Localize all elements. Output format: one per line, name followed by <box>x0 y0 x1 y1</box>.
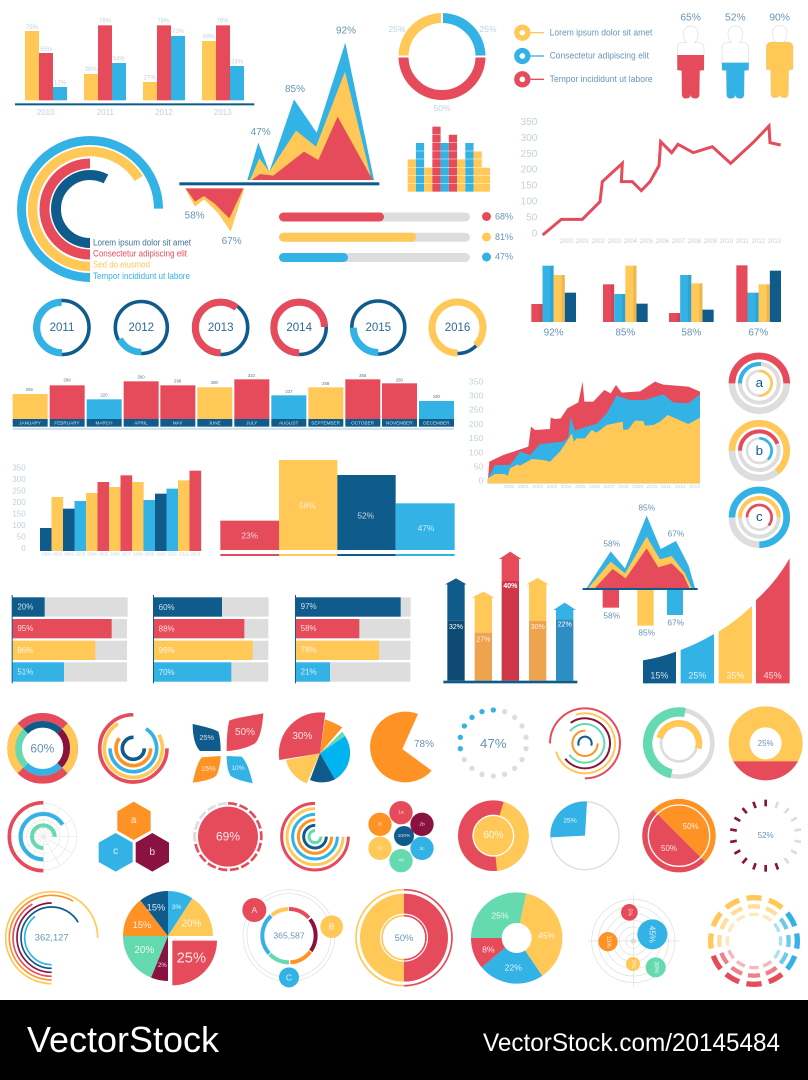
bubble flower: 4d <box>398 858 404 864</box>
small mountain with bars: 58% <box>603 611 621 621</box>
radial bar chart with legend: Sed do eiusmod <box>93 260 150 270</box>
monthly bar chart: 258 <box>322 381 330 386</box>
horizontal bars group 2 <box>153 595 269 683</box>
exploded pie 30% <box>279 712 350 783</box>
yearly vertical bar chart: 100 <box>12 521 26 530</box>
line chart: 2011 <box>736 239 749 245</box>
monthly bar chart: 310 <box>248 373 256 378</box>
stacked area chart: 250 <box>469 405 484 415</box>
stacked area chart: 150 <box>469 433 484 443</box>
thin concentric arcs <box>547 706 623 781</box>
monthly bar chart: JUNE <box>209 420 221 425</box>
yearly vertical bar chart: 300 <box>12 475 26 484</box>
yearly vertical bar chart: 2006 <box>110 551 120 556</box>
exploded pie with 25% slice: 20% <box>181 918 201 929</box>
horizontal bars group 2: 96% <box>159 646 175 655</box>
yearly vertical bar chart: 2004 <box>87 551 97 556</box>
disc with dashed ring 69% <box>190 799 266 874</box>
curved rising bars: 25% <box>688 671 706 681</box>
ring 2014 <box>272 300 326 354</box>
line chart: 2004 <box>624 239 638 245</box>
curved rising bars: 45% <box>764 671 782 681</box>
bar chart: yearly 2010-2013: 78% <box>157 19 170 25</box>
line chart: 150 <box>521 180 538 191</box>
stacked area chart: 300 <box>469 391 484 401</box>
stacked area chart: 2008 <box>618 484 629 490</box>
icon legend: Lorem ipsum dolor sit amet <box>550 27 653 37</box>
polar bubble chart: 5% <box>626 908 632 916</box>
ring 2012 <box>115 302 167 354</box>
half and half disc 50% <box>642 799 716 872</box>
exploded pie with 25% slice: 15% <box>147 902 165 912</box>
line chart: 2013 <box>768 239 782 245</box>
ring with satellites 365,587: A <box>251 905 257 915</box>
small mountain with bars <box>583 502 698 637</box>
bar chart: yearly 2010-2013: 30% <box>85 67 97 73</box>
green and yellow gauge rings <box>641 705 717 781</box>
exploded pie with 25% slice <box>123 891 217 985</box>
yearly vertical bar chart: 2011 <box>168 551 178 556</box>
stacked area chart: 2003 <box>547 484 558 490</box>
segmented ring <box>693 880 808 1002</box>
line chart: 2010 <box>720 239 734 245</box>
polar bubble chart: 5% <box>630 960 636 968</box>
bubble flower <box>368 801 434 872</box>
polar bubble chart: 15% <box>605 936 611 948</box>
bar chart: yearly 2010-2013: 2011 <box>97 108 114 117</box>
yellow disc 25% <box>729 706 803 780</box>
horizontal bars group 1: 20% <box>17 602 33 611</box>
yearly vertical bar chart: 150 <box>12 509 26 518</box>
two-tone donut 60%: 60% <box>483 830 503 841</box>
monthly bar chart: 289 <box>63 377 71 382</box>
monthly bar chart <box>13 373 454 430</box>
bar chart: yearly 2010-2013: 55% <box>40 47 53 53</box>
ring with satellites 365,587: B <box>329 922 335 932</box>
exploded pie with 25% slice: 15% <box>133 920 151 930</box>
mountain chart with baseline: 92% <box>336 25 356 36</box>
line chart: 2001 <box>576 239 590 245</box>
monthly bar chart: JANUARY <box>19 420 41 425</box>
four grouped bar charts: 58% <box>681 327 701 338</box>
four wide bars: 58% <box>299 500 316 510</box>
stacked area chart: 2002 <box>532 484 543 490</box>
radial bar chart with legend: Consectetur adipiscing elit <box>93 248 187 260</box>
ring 2016: 2016 <box>445 322 470 334</box>
line chart: 2000 <box>560 239 574 245</box>
bubble flower: 1a <box>398 810 404 816</box>
double ring 50% <box>356 890 452 986</box>
mountain chart with baseline: 85% <box>285 84 305 95</box>
mountain chart with baseline: 67% <box>222 236 242 247</box>
line chart: 2008 <box>688 239 702 245</box>
bar chart: yearly 2010-2013: 27% <box>144 75 156 81</box>
bubble flower: 6f <box>378 821 383 827</box>
donut chart top: 25% <box>388 24 406 34</box>
donut 60% <box>0 704 87 793</box>
tick gauge 52%: 52% <box>758 831 774 840</box>
yearly vertical bar chart: 2001 <box>53 551 63 556</box>
line chart: 100 <box>521 196 538 207</box>
bar chart: yearly 2010-2013: 75% <box>26 25 39 31</box>
small mountain with bars: 85% <box>638 502 656 512</box>
people icons: 52% <box>725 12 746 23</box>
ring 2011: 2011 <box>50 322 74 334</box>
arrow bars: 27% <box>476 636 490 643</box>
rainbow arcs <box>282 803 348 870</box>
yearly vertical bar chart: 2007 <box>122 551 132 556</box>
ring 2012: 2012 <box>129 322 154 334</box>
bar chart: yearly 2010-2013: 78% <box>217 19 229 25</box>
horizontal bars group 3: 58% <box>301 624 317 633</box>
four grouped bar charts <box>531 265 781 338</box>
bar chart: yearly 2010-2013: 12% <box>54 80 67 86</box>
polar grid rings <box>9 803 77 871</box>
multi arc counter 362,127: 362,127 <box>35 933 69 943</box>
small mountain with bars: 67% <box>668 528 685 538</box>
quarter pie outline 25% <box>550 802 619 870</box>
monthly bar chart: MARCH <box>95 420 113 425</box>
yearly vertical bar chart: 2008 <box>133 551 143 556</box>
ring 2016 <box>432 302 484 354</box>
line chart: 2006 <box>656 239 670 245</box>
line chart: 2007 <box>672 239 686 245</box>
horizontal bars group 3: 21% <box>301 667 317 676</box>
line chart: 350 <box>521 117 538 128</box>
year rings row <box>35 300 484 354</box>
yearly vertical bar chart <box>12 463 201 556</box>
watermark footer <box>0 1000 808 1080</box>
line chart: 2009 <box>704 239 718 245</box>
stacked area chart <box>469 376 700 490</box>
monthly bar chart: 300 <box>137 374 145 379</box>
disc with dashed ring 69%: 69% <box>216 830 240 844</box>
curved rising bars: 15% <box>650 671 668 681</box>
ring 2014: 2014 <box>286 322 313 334</box>
four grouped bar charts: 85% <box>615 327 635 338</box>
four wide bars: 23% <box>241 531 259 541</box>
yearly vertical bar chart: 2010 <box>156 551 166 556</box>
four grouped bar charts: 92% <box>544 327 564 338</box>
bar chart: yearly 2010-2013: 69% <box>203 35 216 41</box>
arrow bars: 40% <box>503 583 518 590</box>
monthly bar chart: DECEMBER <box>423 420 450 425</box>
monthly bar chart: OCTOBER <box>351 420 375 425</box>
yearly vertical bar chart: 50 <box>17 532 26 541</box>
monthly bar chart: FEBRUARY <box>54 420 80 425</box>
yearly vertical bar chart: 2003 <box>76 551 86 556</box>
ring c: c <box>756 509 763 524</box>
stacked area chart: 2007 <box>604 484 615 490</box>
monthly bar chart: 280 <box>211 380 219 385</box>
progress bars <box>279 212 513 262</box>
ring c <box>732 490 787 545</box>
monthly bar chart: 298 <box>174 378 182 383</box>
watermark footer: VectorStock <box>27 1019 220 1060</box>
donut pie with labels <box>471 892 562 984</box>
pacman pie 78% <box>370 712 434 782</box>
yearly vertical bar chart: 2012 <box>179 551 189 556</box>
horizontal bars group 3: 78% <box>301 645 317 654</box>
stacked area chart: 2006 <box>589 484 600 490</box>
arrow bars: 32% <box>449 624 463 631</box>
ring 2015: 2015 <box>366 322 391 334</box>
ring 2013 <box>194 300 248 354</box>
ring a: a <box>756 375 764 390</box>
line chart: 2002 <box>592 239 606 245</box>
donut pie with labels: 45% <box>538 931 556 941</box>
stacked area chart: 100 <box>469 447 484 457</box>
curved rising bars <box>643 558 790 683</box>
line chart: 200 <box>521 164 538 175</box>
half and half disc 50%: 50% <box>683 822 699 831</box>
exploded pie with 25% slice: 2% <box>158 963 167 969</box>
hexagons: b <box>150 847 156 858</box>
multi arc counter 362,127 <box>6 892 98 984</box>
bubble flower: 3c <box>419 846 425 852</box>
stacked area chart: 2001 <box>518 484 529 490</box>
four petals <box>193 713 263 783</box>
donut pie with labels: 22% <box>505 962 522 972</box>
monthly bar chart: AUGUST <box>279 420 299 425</box>
stacked area chart: 2012 <box>675 484 686 490</box>
small mountain with bars: 67% <box>667 617 685 627</box>
icon legend: Tempor incididunt ut labore <box>550 74 653 84</box>
hexagons: a <box>131 815 137 826</box>
stacked area chart: 350 <box>469 376 484 386</box>
exploded pie with 25% slice: 25% <box>177 950 206 966</box>
two-tone donut 60% <box>458 800 529 871</box>
line chart: 300 <box>521 133 538 144</box>
exploded pie with 25% slice: 3% <box>172 904 182 911</box>
horizontal bars group 1: 95% <box>17 624 33 633</box>
watermark footer: VectorStock.com/20145484 <box>483 1029 780 1057</box>
small mountain with bars: 58% <box>603 538 621 548</box>
pacman pie 78%: 78% <box>414 739 434 750</box>
ring with satellites 365,587: 365,587 <box>273 931 305 941</box>
monthly bar chart: MAY <box>173 420 183 425</box>
stacked area chart: 2011 <box>661 484 671 490</box>
concentric rings a b c <box>732 356 787 545</box>
line chart: 2012 <box>752 239 766 245</box>
stacked area chart: 2005 <box>575 484 586 490</box>
bar chart: yearly 2010-2013 <box>15 19 254 117</box>
yearly vertical bar chart: 2002 <box>64 551 74 556</box>
stacked area chart: 50 <box>474 462 484 472</box>
hexagons: c <box>113 846 118 857</box>
horizontal bars group 3 <box>295 595 411 683</box>
bar chart: yearly 2010-2013: 73% <box>172 29 185 35</box>
four petals: 15% <box>201 764 216 773</box>
exploded pie 30%: 30% <box>292 731 312 742</box>
mountain chart with baseline <box>179 25 379 247</box>
bar chart: yearly 2010-2013: 2010 <box>37 108 55 117</box>
yearly vertical bar chart: 2005 <box>99 551 109 556</box>
line chart: 0 <box>532 228 538 239</box>
yearly vertical bar chart: 350 <box>12 463 26 472</box>
ring 2015 <box>352 301 405 354</box>
stacked area chart: 200 <box>469 419 484 429</box>
stacked area chart: 2013 <box>689 484 700 490</box>
monthly bar chart: 256 <box>26 387 34 392</box>
line chart: 2003 <box>608 239 622 245</box>
horizontal bars group 2: 88% <box>159 624 175 633</box>
monthly bar chart: SEPTEMBER <box>311 420 341 425</box>
ring b <box>732 423 787 478</box>
monthly bar chart: 237 <box>285 389 293 394</box>
people icons: 90% <box>769 12 790 23</box>
icon legend: Consectetur adipiscing elit <box>550 51 649 61</box>
ring 2011 <box>35 300 89 354</box>
radial bar chart with legend: Tempor incididunt ut labore <box>93 271 190 282</box>
monthly bar chart: JULY <box>246 420 257 425</box>
stacked area chart: 2010 <box>647 484 658 490</box>
yearly vertical bar chart: 0 <box>21 544 26 553</box>
polar bubble chart: 45% <box>647 926 657 943</box>
stacked grid bars <box>404 127 494 192</box>
monthly bar chart: 280 <box>396 377 404 382</box>
donut pie with labels: 8% <box>482 944 495 954</box>
bubble flower: 2b <box>419 821 425 827</box>
bar chart: yearly 2010-2013: 78% <box>99 19 112 25</box>
horizontal bars group 2: 70% <box>159 668 175 677</box>
exploded pie with 25% slice: 20% <box>134 945 154 956</box>
polar bubble chart: 30% <box>653 961 659 974</box>
horizontal bars group 1: 86% <box>17 646 33 655</box>
progress bars: 81% <box>495 232 513 242</box>
radial bar chart with legend: Lorem ipsum dolor sit amet <box>93 238 191 248</box>
ring b: b <box>756 443 763 458</box>
line chart <box>521 117 782 245</box>
donut chart top <box>388 10 497 113</box>
ring 2013: 2013 <box>208 322 233 334</box>
four wide bars: 47% <box>418 523 435 533</box>
stacked area chart: 0 <box>479 476 484 486</box>
hexagons <box>99 802 169 872</box>
horizontal bars group 1 <box>12 595 128 683</box>
four petals: 50% <box>235 727 255 738</box>
line chart: 2005 <box>640 239 654 245</box>
monthly bar chart: NOVEMBER <box>386 420 413 425</box>
progress bars: 68% <box>495 212 513 222</box>
bar chart: yearly 2010-2013: 2012 <box>155 108 173 117</box>
yearly vertical bar chart: 2013 <box>191 551 201 556</box>
mountain chart with baseline: 47% <box>251 127 271 138</box>
people icons: 65% <box>680 12 701 23</box>
four wide bars <box>220 460 455 556</box>
half and half disc 50%: 50% <box>661 844 677 853</box>
icon legend <box>517 27 653 85</box>
four petals: 10% <box>231 765 245 772</box>
horizontal bars group 2: 60% <box>159 603 175 612</box>
donut pie with labels: 25% <box>491 911 509 921</box>
horizontal bars group 1: 51% <box>17 667 33 676</box>
stacked area chart: 2009 <box>632 484 643 490</box>
donut 60%: 60% <box>30 742 55 756</box>
progress bars: 47% <box>495 252 513 262</box>
arrow bars: 22% <box>558 621 572 628</box>
dotted ring 47%: 47% <box>480 736 507 751</box>
monthly bar chart: 220 <box>100 392 108 397</box>
bubble flower: 5e <box>377 846 383 852</box>
four wide bars: 52% <box>357 510 375 520</box>
bar chart: yearly 2010-2013: 34% <box>113 56 125 62</box>
horizontal bars group 3: 97% <box>301 602 317 611</box>
bubble flower: 100% <box>398 833 411 839</box>
donut chart top: 25% <box>479 24 497 34</box>
radial bar chart with legend <box>22 140 191 282</box>
yellow disc 25%: 25% <box>758 739 774 748</box>
people icons <box>677 12 793 98</box>
arrow bars: 30% <box>531 624 545 631</box>
yearly vertical bar chart: 200 <box>12 498 26 507</box>
monthly bar chart: APRIL <box>134 420 148 425</box>
bar chart: yearly 2010-2013: 2013 <box>214 108 232 117</box>
bar chart: yearly 2010-2013: 33% <box>231 60 244 66</box>
ring with satellites 365,587 <box>242 890 343 987</box>
stacked area chart: 2004 <box>561 484 572 490</box>
yearly vertical bar chart: 2000 <box>41 551 51 556</box>
mountain chart with baseline: 58% <box>185 210 205 221</box>
arrow bars <box>443 552 577 683</box>
donut chart top: 50% <box>433 103 451 113</box>
monthly bar chart: 190 <box>433 394 441 399</box>
ring a <box>732 356 787 411</box>
line chart: 250 <box>521 149 538 160</box>
curved rising bars: 35% <box>726 671 744 681</box>
four grouped bar charts: 67% <box>748 327 768 338</box>
ring with satellites 365,587: C <box>286 972 292 982</box>
yearly vertical bar chart: 2009 <box>145 551 155 556</box>
line chart: 50 <box>526 212 538 223</box>
four petals: 25% <box>199 733 214 742</box>
dotted ring 47% <box>458 707 529 779</box>
quarter pie outline 25%: 25% <box>563 817 577 824</box>
concentric arcs <box>94 709 173 788</box>
small mountain with bars: 85% <box>638 627 656 637</box>
polar bubble chart <box>588 895 679 987</box>
monthly bar chart: 355 <box>359 373 367 378</box>
double ring 50%: 50% <box>395 933 413 943</box>
stacked area chart: 2000 <box>504 484 515 490</box>
yearly vertical bar chart: 250 <box>12 486 26 495</box>
tick gauge 52% <box>730 800 801 872</box>
